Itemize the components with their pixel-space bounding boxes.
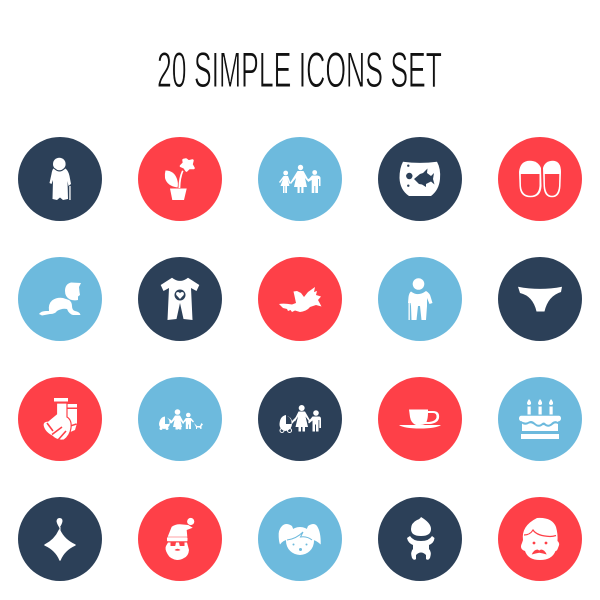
icon: pair of socks [18,377,102,461]
icon: santa face [138,497,222,581]
icon: family holding hands [258,137,342,221]
icon: crawling baby [18,257,102,341]
icon: cup and saucer [378,377,462,461]
icon: fish bowl [378,137,462,221]
icon: star ornament [18,497,102,581]
icon: girl with pigtails [258,497,342,581]
icon: mother with stroller and child [258,377,342,461]
icon: dove bird [258,257,342,341]
icon: elderly man with cane [378,257,462,341]
icon: baby [378,497,462,581]
icon: potted flower [138,137,222,221]
icon: man with moustache [498,497,582,581]
icon: underwear [498,257,582,341]
icon: birthday cake with candles [498,377,582,461]
icon: mother with stroller, child and dog [138,377,222,461]
icon: baby bodysuit with heart [138,257,222,341]
icon: slippers [498,137,582,221]
icon: grandmother with cane [18,137,102,221]
